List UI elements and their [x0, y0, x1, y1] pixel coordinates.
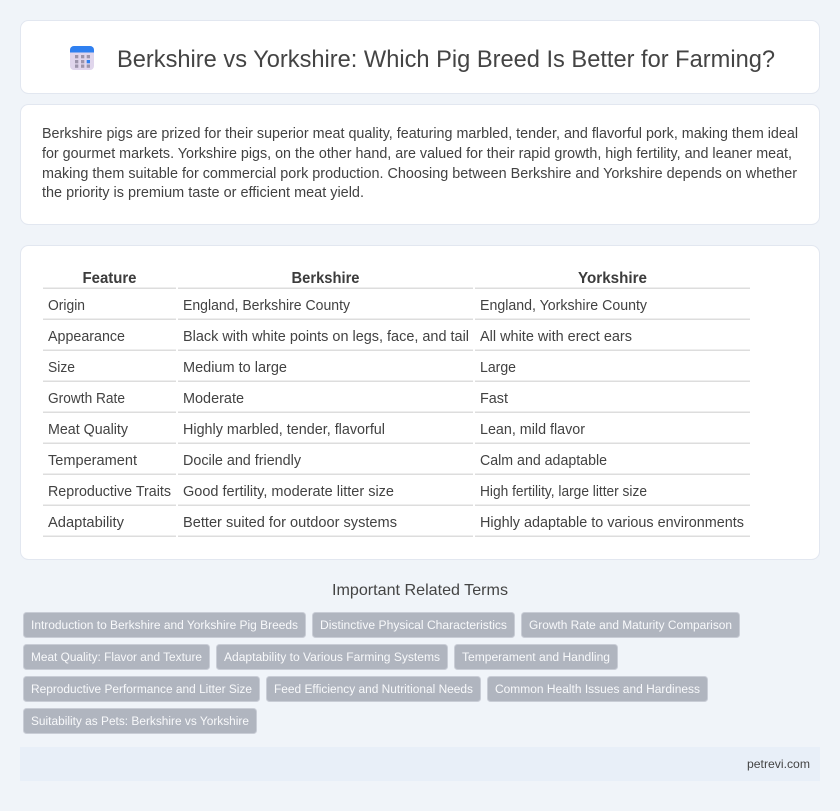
tag: Reproductive Performance and Litter Size	[31, 682, 252, 696]
intro text: making them suitable for commercial pork production. Choosing between Berkshire and Yorkshire depends on whether	[42, 166, 797, 182]
row: meat quality: Lean, mild flavor	[480, 422, 585, 438]
row: appearance	[48, 329, 632, 345]
icon: calendar	[70, 46, 94, 70]
site name: petrevi.com	[747, 757, 810, 771]
comparison table	[43, 270, 750, 537]
row: reproductive traits: High fertility, large litter size	[480, 484, 647, 500]
row: reproductive traits: Good fertility, moderate litter size	[183, 484, 394, 500]
row: size: Large	[480, 360, 516, 376]
row: temperament: Calm and adaptable	[480, 453, 607, 469]
table header: Yorkshire	[578, 270, 647, 287]
tag: Meat Quality: Flavor and Texture	[31, 650, 202, 664]
row: meat quality: Meat Quality	[48, 422, 129, 438]
tag	[312, 612, 514, 638]
row: appearance: Black with white points on legs, face, and tail	[183, 329, 469, 345]
tag: Suitability as Pets: Berkshire vs Yorkshire	[31, 714, 249, 728]
row: growth rate: Moderate	[183, 391, 244, 407]
row: temperament	[48, 453, 607, 469]
row: size	[48, 360, 516, 376]
row: origin	[48, 298, 648, 314]
tag	[216, 644, 448, 670]
row: adaptability: Highly adaptable to various environments	[480, 515, 744, 531]
row: origin: England, Yorkshire County	[480, 298, 648, 314]
row: meat quality	[48, 422, 585, 438]
row: meat quality: Highly marbled, tender, flavorful	[183, 422, 385, 438]
table header: Feature	[82, 270, 137, 287]
row: size: Size	[48, 360, 75, 376]
row: adaptability: Adaptability	[48, 515, 125, 531]
tag	[24, 644, 210, 670]
tag: Temperament and Handling	[462, 650, 610, 664]
intro panel	[20, 104, 820, 224]
tag	[522, 612, 740, 638]
table header: Berkshire	[292, 270, 360, 287]
tag	[266, 676, 480, 702]
intro text	[42, 126, 798, 201]
related terms heading: Important Related Terms	[332, 582, 508, 599]
row: adaptability	[48, 515, 744, 531]
title: Berkshire vs Yorkshire: Which Pig Breed Is Better for Farming?	[117, 46, 775, 73]
row: temperament: Docile and friendly	[183, 453, 302, 469]
tag: Adaptability to Various Farming Systems	[224, 650, 440, 664]
tag: Common Health Issues and Hardiness	[495, 682, 700, 696]
tag	[24, 612, 306, 638]
row: size: Medium to large	[183, 360, 287, 376]
tag	[24, 676, 260, 702]
row: growth rate: Fast	[480, 391, 508, 407]
tag	[488, 676, 708, 702]
intro text: for gourmet markets. Yorkshire pigs, on the other hand, are valued for their rapid growth, high fertility, and leaner meat,	[42, 146, 792, 162]
tag	[454, 644, 618, 670]
tag: Distinctive Physical Characteristics	[320, 618, 507, 632]
row: reproductive traits	[48, 484, 647, 500]
header panel	[20, 20, 820, 94]
footer	[20, 747, 820, 781]
tag: Growth Rate and Maturity Comparison	[529, 618, 732, 632]
row: appearance: All white with erect ears	[480, 329, 632, 345]
row: origin: England, Berkshire County	[183, 298, 351, 314]
intro text: Berkshire pigs are prized for their superior meat quality, featuring marbled, tender, and flavorful pork, making them ideal	[42, 126, 798, 142]
row: reproductive traits: Reproductive Traits	[48, 484, 171, 500]
row: adaptability: Better suited for outdoor systems	[183, 515, 397, 531]
row: growth rate	[48, 391, 508, 407]
row: appearance: Appearance	[48, 329, 125, 345]
related term tags	[24, 612, 740, 734]
tag: Introduction to Berkshire and Yorkshire Pig Breeds	[31, 618, 298, 632]
tag: Feed Efficiency and Nutritional Needs	[274, 682, 473, 696]
table header	[82, 270, 647, 287]
intro text: the priority is premium taste or efficient meat yield.	[42, 185, 364, 201]
row: temperament: Temperament	[48, 453, 137, 469]
row: origin: Origin	[48, 298, 85, 314]
tag	[24, 708, 256, 734]
row: growth rate: Growth Rate	[48, 391, 125, 407]
table panel	[20, 246, 820, 560]
